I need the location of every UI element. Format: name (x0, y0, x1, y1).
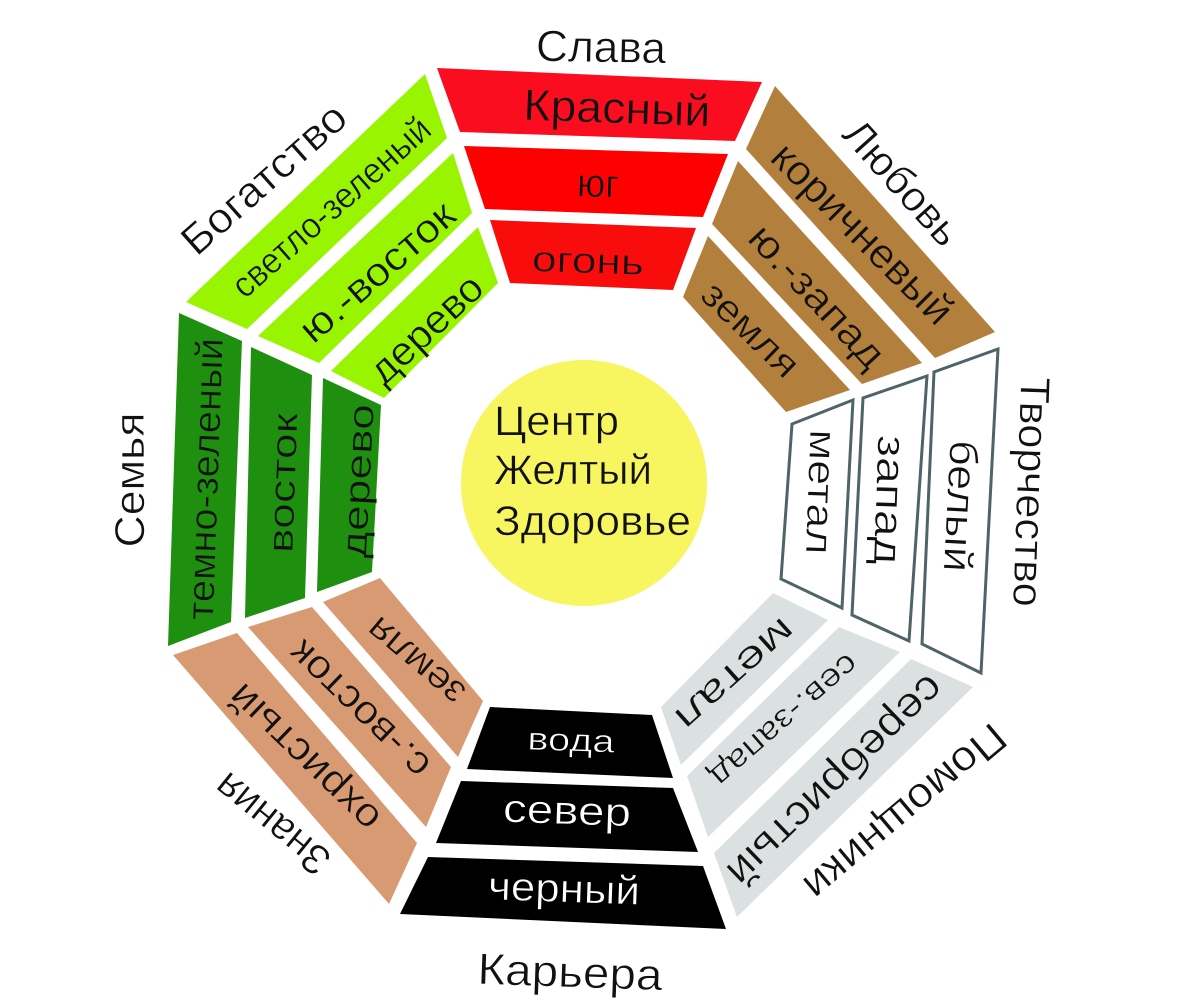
band: огонь: огонь (531, 238, 645, 283)
band: ю.-восток: ю.-восток (290, 192, 465, 352)
sector: Любовь (south-west) (683, 86, 995, 412)
center circle (461, 360, 707, 606)
band: коричневый (746, 86, 995, 358)
center label: Центр: Центр (494, 397, 619, 444)
sector: Богатство (south-east) (171, 74, 498, 398)
center label: Здоровье: Здоровье (494, 497, 691, 544)
band: земля: земля (692, 273, 808, 387)
band: земля: земля (358, 608, 474, 714)
band: дерево (317, 378, 382, 592)
band: с.-восток (248, 607, 451, 827)
band: метал: метал (797, 429, 843, 555)
heading: Знания: Знания (204, 763, 340, 885)
band: восток (245, 347, 312, 618)
band: ю.-запад (712, 161, 922, 384)
band: темно-зеленый (168, 313, 242, 646)
band: ю.-восток (258, 153, 472, 363)
band: сев.-запад (687, 627, 900, 837)
band: охристый: охристый (219, 675, 389, 841)
band: юг: юг (576, 161, 620, 207)
band: метал (661, 593, 828, 765)
band: дерево: дерево (333, 403, 382, 559)
band: дерево (331, 227, 498, 398)
heading: Семья: Семья (106, 412, 153, 548)
band: север: север (502, 787, 632, 835)
band: ю.-запад: ю.-запад (739, 215, 894, 377)
heading: Карьера: Карьера (477, 945, 664, 1000)
band: огонь (490, 220, 696, 290)
sector: Творчество (west) (781, 349, 1059, 673)
band: метал (781, 400, 853, 608)
band: коричневый: коричневый (762, 132, 964, 334)
band: с.-восток: с.-восток (279, 631, 439, 788)
band: восток: восток (260, 412, 305, 554)
band: Красный: Красный (523, 81, 711, 136)
sector: Помощники (north-west) (661, 593, 1016, 917)
band: запад: запад (865, 434, 913, 566)
band: светло-зеленый: светло-зеленый (223, 108, 439, 306)
band: охристый (173, 633, 417, 904)
band: земля (683, 236, 850, 412)
band: белый: белый (935, 439, 985, 573)
band: дерево: дерево (360, 265, 493, 393)
heading: Слава: Слава (536, 22, 667, 73)
band: Красный (437, 68, 762, 141)
band: серебристый (714, 659, 973, 917)
band: земля (323, 578, 483, 757)
band: темно-зеленый: темно-зеленый (180, 337, 232, 621)
sector: Слава (south) (437, 22, 762, 290)
center label: Желтый: Желтый (494, 446, 652, 493)
band: метал: метал (666, 609, 804, 739)
heading: Помощники: Помощники (794, 714, 1016, 911)
band: белый (922, 349, 998, 673)
sector: Семья (east) (106, 313, 382, 646)
band: вода: вода (527, 720, 615, 760)
heading: Творчество: Творчество (1004, 376, 1059, 608)
heading: Любовь: Любовь (834, 110, 971, 255)
band: черный: черный (487, 864, 641, 914)
band: светло-зеленый (186, 74, 447, 329)
band: юг (464, 146, 728, 217)
sector: Карьера (north) (400, 707, 726, 1000)
sector: Знания (north-east) (173, 578, 483, 904)
band: вода (467, 707, 673, 778)
heading: Богатство: Богатство (171, 93, 356, 264)
band: север (436, 781, 698, 852)
band: черный (400, 857, 726, 929)
band: серебристый: серебристый (718, 666, 955, 897)
band: запад (852, 376, 927, 641)
band: сев.-запад: сев.-запад (703, 646, 866, 795)
